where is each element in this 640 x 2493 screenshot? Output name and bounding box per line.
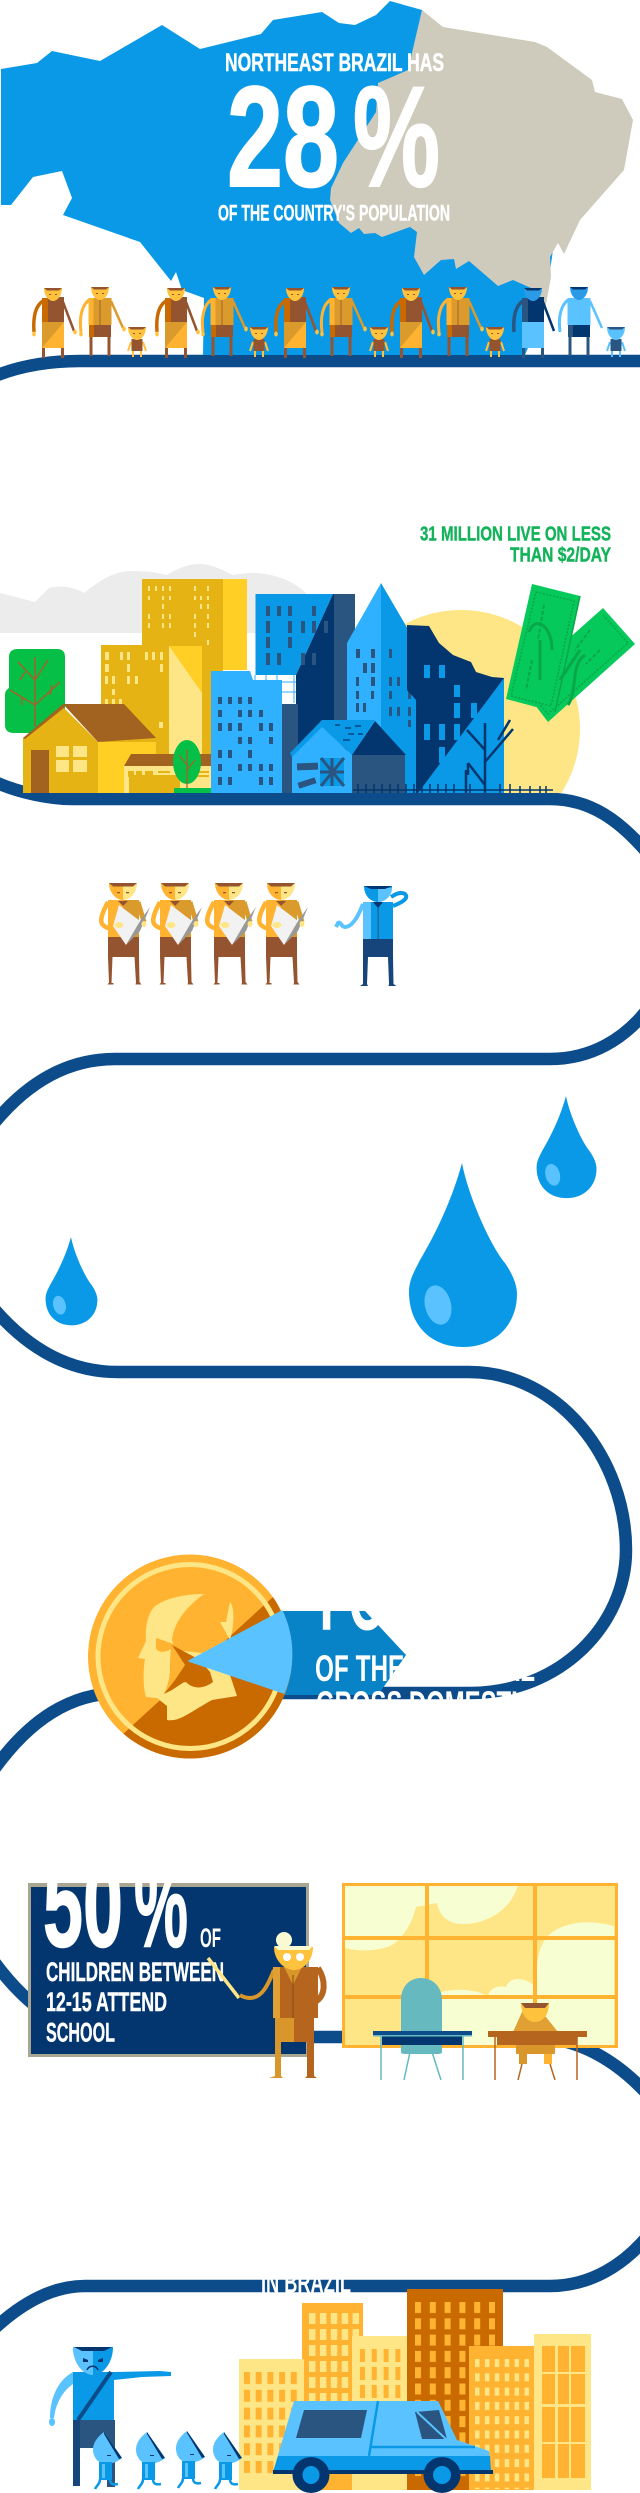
blue arrow label xyxy=(282,1611,406,1695)
police officer xyxy=(49,2347,171,2487)
gold tower xyxy=(142,579,247,793)
ruined building xyxy=(407,625,504,793)
text: of: OF xyxy=(200,1923,221,1953)
cloud xyxy=(0,564,306,633)
blue figure scratching head xyxy=(336,886,406,986)
text: children between 12-15 attend school: SCHOOL xyxy=(46,2018,115,2048)
stat: 28%: % xyxy=(353,58,440,217)
map: blue brazil xyxy=(1,1,560,355)
readers group xyxy=(101,883,308,984)
chalkboard xyxy=(28,1836,309,2057)
panel: school xyxy=(28,1883,618,2080)
chalkboard: % xyxy=(134,1836,188,1972)
text: of the national gross domestic xyxy=(315,1648,535,1725)
dead tree xyxy=(466,720,513,793)
stat: partially hidden number: FO xyxy=(320,1556,386,1647)
panel: population map xyxy=(1,1,633,358)
stat: 28%: 28 xyxy=(227,58,339,217)
window xyxy=(342,1883,618,2048)
road: winding blue path xyxy=(0,361,640,2328)
small tree xyxy=(173,740,211,793)
empty desk and chair xyxy=(373,1978,472,2080)
broken blue house xyxy=(290,720,406,793)
marching children xyxy=(93,2431,242,2489)
icon: coin xyxy=(88,1554,292,1758)
text: of the country's population: OF THE COUNTRY'S POPULATION xyxy=(218,200,450,226)
text: 31 million live on less than $2/day: THAN $2/DAY xyxy=(510,544,612,566)
dark blue tall building xyxy=(256,594,355,793)
map: grey northeast region xyxy=(330,10,633,325)
tower with spire xyxy=(347,583,416,793)
icon: upper right water drop xyxy=(537,1096,597,1198)
heading: northeast brazil has: NORTHEAST BRAZIL HAS xyxy=(225,49,444,77)
text: children between 12-15 attend school xyxy=(46,1957,224,2048)
teacher xyxy=(208,1932,324,2078)
broken bright blue building xyxy=(211,671,298,793)
text: children between 12-15 attend school: CHILDREN BETWEEN xyxy=(46,1957,224,1987)
panel: city and police xyxy=(49,2289,591,2493)
panel: poverty city xyxy=(0,526,635,793)
student at desk xyxy=(488,2003,587,2080)
text: of the national gross domestic: OF THE NATIONAL xyxy=(315,1648,535,1689)
van xyxy=(273,2401,493,2493)
gold house xyxy=(23,704,156,793)
skyline xyxy=(239,2289,591,2490)
icon: left water drop xyxy=(46,1237,97,1325)
panel: readers and outsider figure xyxy=(101,883,406,986)
panel: gdp coin xyxy=(88,1554,534,1758)
panel: water drops xyxy=(46,1096,597,1347)
sun xyxy=(405,610,580,793)
money bills xyxy=(506,584,635,722)
tree: large green xyxy=(5,649,65,733)
gold lower block xyxy=(101,645,211,793)
garage xyxy=(124,754,211,793)
people row xyxy=(32,287,625,358)
pie wedge xyxy=(189,1611,292,1693)
stat: 50%: 50 xyxy=(43,1836,123,1972)
fence xyxy=(353,784,553,793)
text: 31 million live on less than $2/day xyxy=(420,524,612,566)
icon: large water drop xyxy=(409,1163,517,1347)
text: in brazil on road: IN BRAZIL xyxy=(261,2268,351,2300)
text: children between 12-15 attend school: 12-15 ATTEND xyxy=(46,1987,167,2017)
